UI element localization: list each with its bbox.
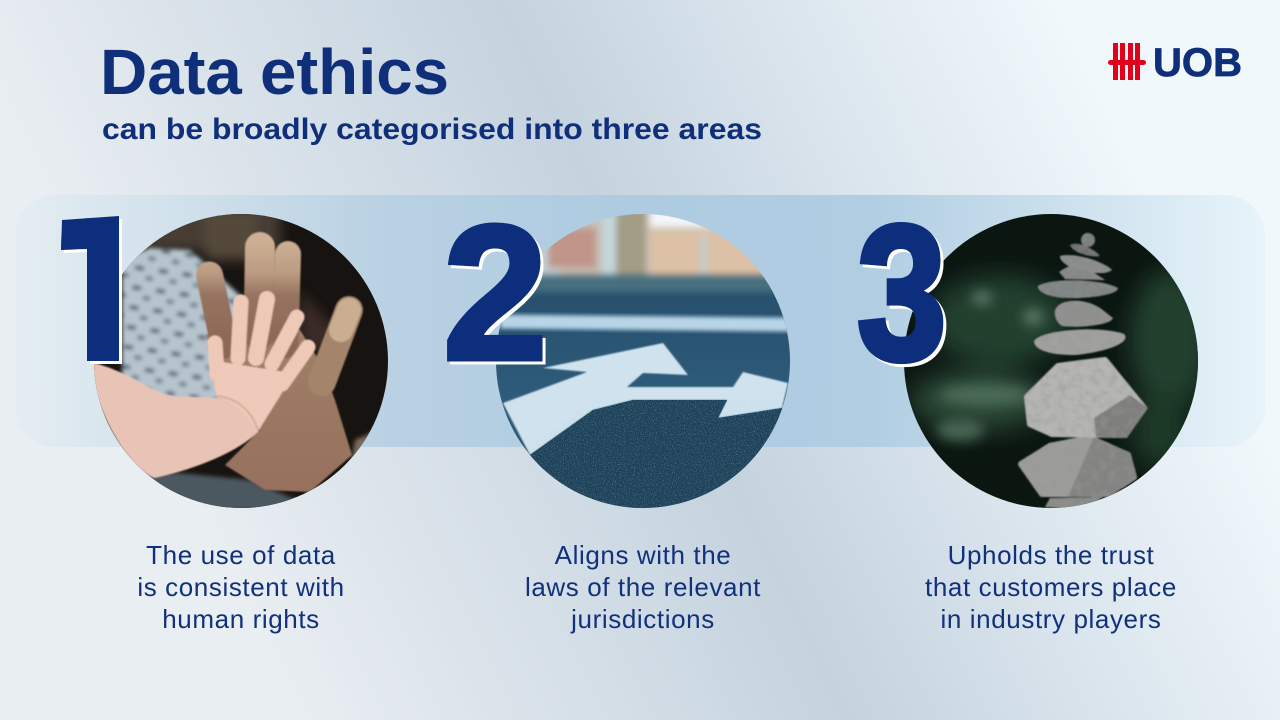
title: Data ethics — [100, 36, 449, 108]
background band panel — [15, 195, 1265, 447]
caption 1: human rights — [162, 604, 320, 634]
caption 2: jurisdictions — [570, 604, 715, 634]
icon: UOB red bars — [1108, 43, 1146, 80]
logo wordmark: UOB — [1153, 41, 1242, 85]
photo 1: adult and baby hands — [90, 205, 390, 510]
caption 1: is consistent with — [137, 572, 345, 602]
caption 2: Aligns with the — [555, 540, 731, 570]
number 3: 3 — [857, 185, 947, 400]
caption 3: in industry players — [941, 604, 1161, 634]
number 1: 1 — [36, 174, 152, 406]
photo 3: stacked stones — [900, 210, 1210, 515]
caption 3: that customers place — [925, 572, 1177, 602]
subtitle: can be broadly categorised into three areas — [102, 113, 762, 146]
caption 1: The use of data — [146, 540, 336, 570]
number 2: 2 — [443, 186, 548, 400]
caption 2: laws of the relevant — [525, 572, 761, 602]
caption 3: Upholds the trust — [948, 540, 1155, 570]
logo: UOB — [1108, 41, 1242, 85]
photo 2: road arrows — [496, 214, 790, 508]
